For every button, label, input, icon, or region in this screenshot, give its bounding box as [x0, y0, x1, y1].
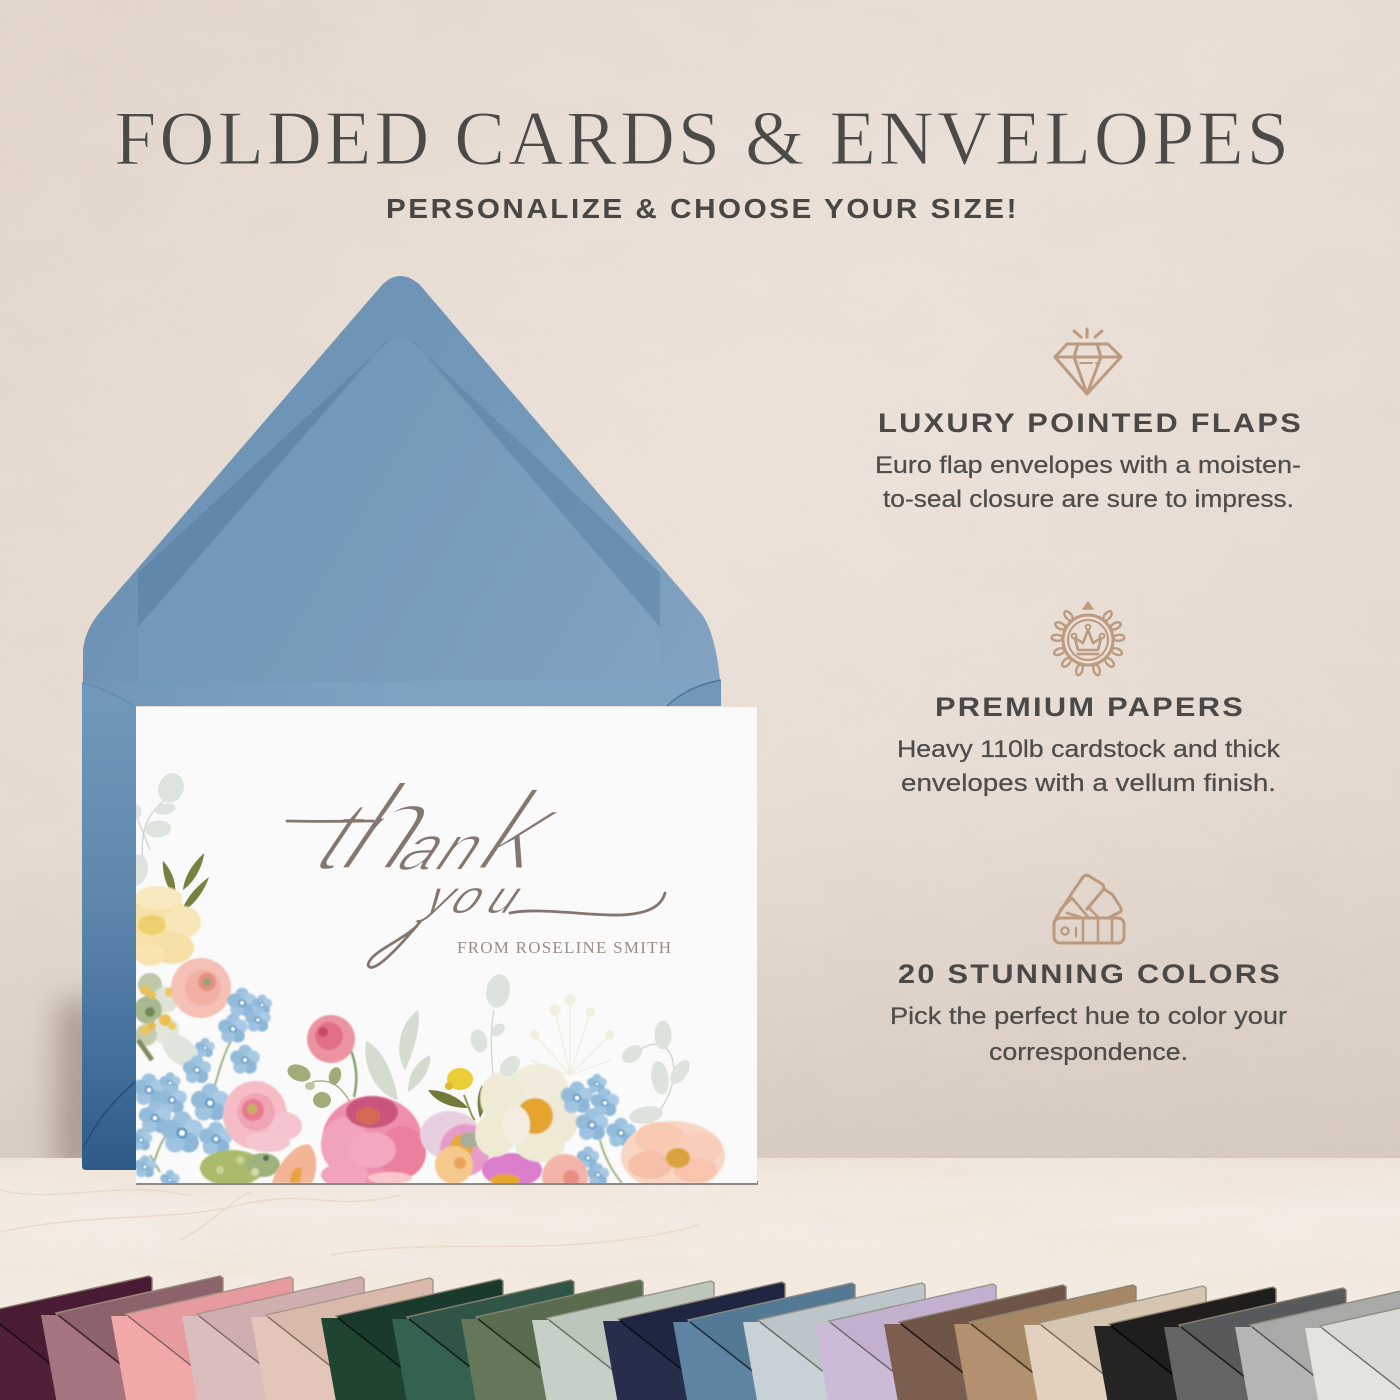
yellow bud [428, 1068, 486, 1120]
description: Pick the perfect hue to color your [890, 1003, 1287, 1030]
pale leaf [162, 1034, 198, 1066]
dandelion [530, 995, 614, 1075]
marble tabletop [0, 1158, 1400, 1400]
eucalyptus right [619, 1021, 694, 1126]
script greeting: k [452, 767, 595, 894]
heading: 20 STUNNING COLORS [898, 959, 1282, 989]
heading: LUXURY POINTED FLAPS [878, 408, 1303, 438]
floral illustration [124, 770, 725, 1200]
envelope shadow on wall [58, 1000, 100, 1175]
white peony [475, 1064, 578, 1162]
envelope: lilac [814, 1284, 996, 1400]
blue envelope [82, 276, 721, 1170]
script greeting: y [413, 871, 472, 924]
description: to-seal closure are sure to impress. [883, 486, 1294, 513]
sender line: FROM ROSELINE SMITH [457, 938, 671, 957]
feature: twenty colors [890, 875, 1287, 1066]
olive leaves [162, 853, 209, 908]
olive sprig [285, 1061, 350, 1108]
liner shadow left [138, 338, 392, 627]
subtitle: PERSONALIZE & CHOOSE YOUR SIZE! [386, 193, 1019, 224]
script greeting: n [420, 813, 504, 884]
icon: swatch fan [1054, 875, 1124, 943]
description [890, 1003, 1287, 1066]
feature: premium papers [897, 602, 1281, 797]
envelope: sand [1024, 1286, 1206, 1400]
feature: luxury pointed flaps [875, 329, 1303, 513]
envelope liner [138, 339, 660, 682]
envelope: mauve [41, 1276, 223, 1400]
description: Euro flap envelopes with a moisten- [875, 452, 1301, 479]
script greeting: u [475, 871, 536, 924]
peach bud [272, 1144, 316, 1183]
envelope: charcoal [1164, 1288, 1346, 1400]
yellow cluster [134, 973, 179, 1060]
green hydrangea [200, 1150, 280, 1186]
envelope: emerald [392, 1280, 574, 1400]
heading: PREMIUM PAPERS [935, 692, 1245, 722]
envelope: dusty blue [673, 1283, 855, 1400]
magenta flower [482, 1153, 542, 1187]
envelope: black [1094, 1287, 1276, 1400]
envelope top band [83, 679, 720, 706]
envelope: cocoa [884, 1285, 1066, 1400]
folded card [124, 707, 757, 1200]
envelope: burgundy [0, 1276, 152, 1400]
envelope: navy [603, 1282, 785, 1400]
script greeting: t [291, 781, 394, 892]
forget-me-nots right [561, 1074, 636, 1185]
lower fold [83, 1082, 135, 1148]
envelope: blush pink [111, 1277, 293, 1400]
coral flower [542, 1154, 588, 1200]
description [897, 736, 1281, 797]
liner shadow right [408, 338, 660, 627]
eucalyptus top left [136, 773, 184, 886]
envelope: silver [1235, 1288, 1400, 1400]
sage leaves [365, 1010, 430, 1100]
description [875, 452, 1301, 513]
envelope: sage dark [461, 1280, 643, 1400]
envelope: dusty rose [182, 1277, 364, 1400]
peach flower [621, 1121, 725, 1191]
envelope: white [1305, 1289, 1400, 1400]
large pink peony [321, 1096, 426, 1187]
script greeting: h [312, 759, 474, 897]
script greeting: o [439, 871, 500, 924]
small pink ranunculus [307, 1015, 356, 1097]
icon: crown medal [1051, 602, 1125, 676]
right envelope corner [667, 680, 721, 706]
forget-me-nots left [130, 988, 272, 1189]
icon: diamond [1055, 329, 1121, 394]
script greeting: a [382, 813, 466, 884]
envelope: forest green [321, 1279, 503, 1400]
description: envelopes with a vellum finish. [901, 770, 1276, 797]
envelope: camel [954, 1285, 1136, 1400]
script flourishes [287, 821, 665, 967]
envelope body [82, 682, 136, 1170]
card shadow [136, 1181, 758, 1185]
script greeting [287, 759, 665, 967]
pink rose [223, 1081, 302, 1152]
envelope: nude [251, 1278, 433, 1400]
envelope color row [0, 1276, 1400, 1400]
description: Heavy 110lb cardstock and thick [897, 736, 1281, 763]
title: FOLDED CARDS & ENVELOPES [114, 95, 1292, 181]
coral ranunculus [171, 958, 231, 1018]
description: correspondence. [989, 1039, 1188, 1066]
envelope: pale sage [532, 1281, 714, 1400]
envelope: ice blue [743, 1283, 925, 1400]
yellow peony [128, 886, 201, 966]
eucalyptus centre [468, 972, 524, 1080]
purple peony [420, 1111, 490, 1184]
envelope flap [83, 276, 720, 684]
